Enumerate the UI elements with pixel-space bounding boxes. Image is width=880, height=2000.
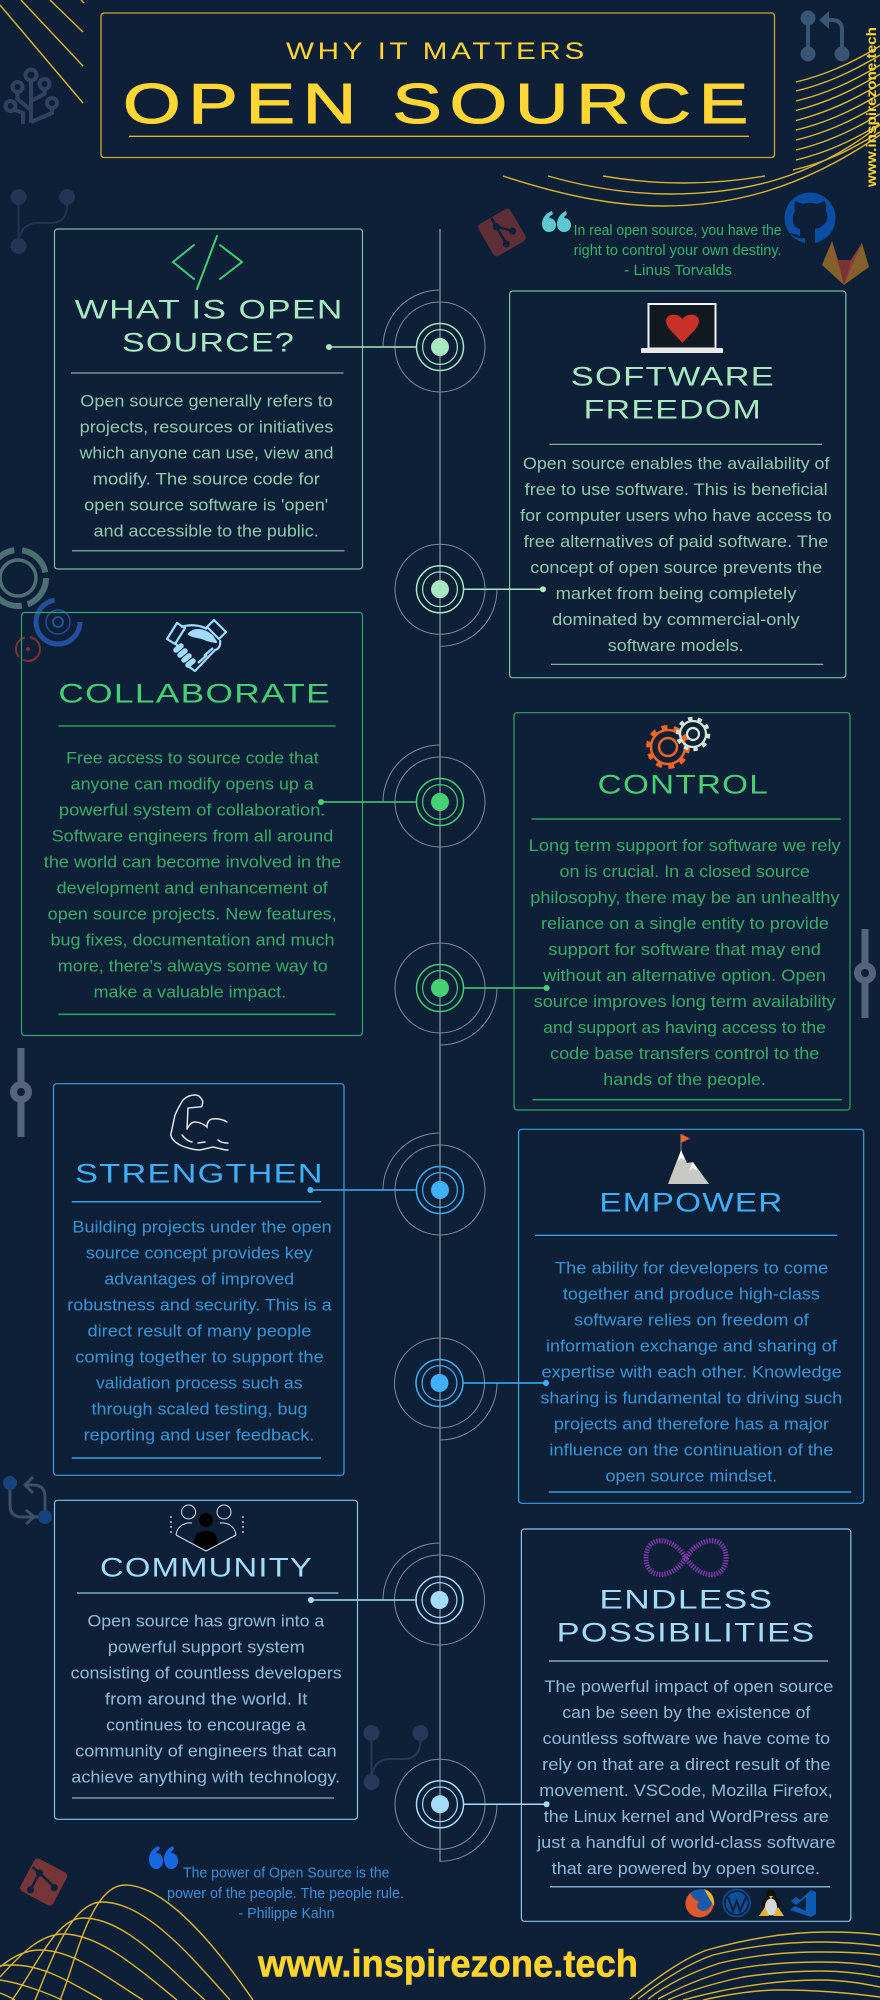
panel: software freedom <box>510 291 846 678</box>
text: endless possibilities body: countless software we have come to <box>543 1729 830 1748</box>
text: collaborate body: development and enhancement of <box>57 878 328 897</box>
text: collaborate body: powerful system of collaboration. <box>59 800 326 819</box>
text: control body: philosophy, there may be an unhealthy <box>530 888 840 907</box>
node 7 <box>308 1543 484 1645</box>
text: strengthen body <box>67 1218 332 1445</box>
text: community body: Open source has grown into a <box>88 1612 325 1631</box>
text: empower body: The ability for developers to come <box>555 1259 828 1278</box>
node 5 <box>307 1133 485 1235</box>
panel: control <box>514 713 850 1110</box>
text: community body: achieve anything with technology. <box>71 1768 340 1787</box>
icon: git branch middle <box>364 1725 428 1790</box>
subtitle: WHY IT MATTERS <box>286 38 588 65</box>
text: strengthen body: validation process such as <box>96 1374 302 1393</box>
panel: what is open source <box>54 229 362 569</box>
text: empower body: together and produce high-class <box>563 1285 820 1304</box>
node 1 <box>326 290 485 392</box>
text: what is open source body: projects, resources or initiatives <box>80 418 333 437</box>
icon: git logo bottom <box>19 1857 69 1907</box>
text: strengthen body: Building projects under the open <box>72 1218 332 1237</box>
text: software freedom body: Open source enables the availability of <box>523 454 830 473</box>
heading: what is open source <box>75 295 344 358</box>
text: control body: and support as having access to the <box>543 1018 826 1037</box>
heading: endless possibilities: POSSIBILITIES <box>557 1617 816 1647</box>
node 8 <box>395 1759 550 1861</box>
text: collaborate body <box>44 748 341 1002</box>
text: software freedom body: for computer users who have access to <box>520 506 832 525</box>
quote: Philippe Kahn: The power of Open Source is the <box>183 1865 390 1882</box>
decoration: top-left yellow diagonal lines <box>0 0 84 103</box>
heading: community: COMMUNITY <box>100 1553 313 1583</box>
quote: Linus Torvalds: In real open source, you have the <box>574 222 782 239</box>
text: control body: without an alternative option. Open <box>542 966 826 985</box>
icon: github <box>784 192 836 245</box>
icon: quote mark blue quote <box>149 1846 178 1869</box>
text: strengthen body: source concept provides key <box>86 1244 313 1263</box>
icon: flexed arm <box>171 1095 228 1150</box>
icon: infinity <box>646 1541 726 1574</box>
text: software freedom body <box>520 454 832 655</box>
heading: empower: EMPOWER <box>599 1188 784 1218</box>
icon: gears <box>648 718 708 767</box>
text: software freedom body: dominated by commercial-only <box>552 610 800 629</box>
decoration: bottom-left yellow curves <box>0 1885 253 2000</box>
text: endless possibilities body: The powerful impact of open source <box>544 1677 833 1696</box>
text: collaborate body: make a valuable impact. <box>94 982 286 1002</box>
text: control body: source improves long term availability <box>534 992 836 1011</box>
text: control body: support for software that may end <box>548 940 821 959</box>
heading: endless possibilities: ENDLESS <box>599 1584 773 1614</box>
text: software freedom body: free to use software. This is beneficial <box>525 480 828 499</box>
text: what is open source body: open source software is 'open' <box>84 496 328 515</box>
main title: OPEN SOURCE <box>123 72 756 136</box>
panel: collaborate <box>22 612 362 1036</box>
icon: handshake <box>167 620 226 671</box>
icon: gitlab <box>822 241 869 285</box>
heading: strengthen: STRENGTHEN <box>75 1159 324 1189</box>
quote: Linus Torvalds <box>574 222 782 279</box>
heading: what is open source: SOURCE? <box>122 328 295 358</box>
text: empower body: influence on the continuation of the <box>549 1441 833 1460</box>
text: community body: continues to encourage a <box>106 1716 306 1735</box>
text: collaborate body: bug fixes, documentation and much <box>50 930 334 949</box>
heading: what is open source: WHAT IS OPEN <box>75 295 344 325</box>
text: strengthen body: reporting and user feedback. <box>84 1426 314 1445</box>
icon: code brackets <box>173 236 242 289</box>
text: what is open source body: and accessible to the public. <box>94 522 319 541</box>
text: community body: from around the world. It <box>105 1690 308 1709</box>
icon: right slider wrench <box>854 929 876 1018</box>
decoration: bottom-right yellow curves <box>630 1932 880 2000</box>
text: software freedom body: free alternatives of paid software. The <box>524 532 828 551</box>
icon: circuit tree <box>6 70 57 124</box>
text: collaborate body: Software engineers from all around <box>52 826 333 845</box>
heading: control: CONTROL <box>598 769 769 799</box>
node 6 <box>394 1338 549 1440</box>
text: control body <box>529 836 841 1089</box>
text: strengthen body: direct result of many people <box>88 1322 311 1341</box>
text: empower body: information exchange and sharing of <box>546 1337 837 1356</box>
text: endless possibilities body <box>536 1677 836 1878</box>
text: community body <box>71 1612 342 1787</box>
text: strengthen body: through scaled testing, bug <box>92 1400 308 1419</box>
icon: arrows swap <box>3 1476 52 1524</box>
icon: tux penguin <box>759 1889 784 1917</box>
vertical website text: www.inspirezone.tech <box>863 27 879 188</box>
heading: software freedom: FREEDOM <box>584 394 762 424</box>
icon: left slider wrench <box>10 1048 32 1137</box>
heading: software freedom: SOFTWARE <box>571 361 775 391</box>
text: endless possibilities body: rely on that are a direct result of the <box>542 1755 831 1774</box>
text: endless possibilities body: just a handful of world-class software <box>536 1833 836 1852</box>
text: collaborate body: anyone can modify opens up a <box>71 774 314 793</box>
text: empower body: open source mindset. <box>606 1467 777 1486</box>
text: collaborate body: open source projects. New features, <box>48 904 337 923</box>
text: what is open source body: Open source generally refers to <box>80 392 333 411</box>
text: what is open source body <box>79 392 333 541</box>
icon: git branch top-left <box>10 189 75 254</box>
icon: pull request <box>800 10 850 62</box>
decoration: top-right yellow wave lines <box>503 46 880 206</box>
text: control body: hands of the people. <box>603 1070 766 1089</box>
text: software freedom body: market from being completely <box>556 584 797 603</box>
text: collaborate body: Free access to source code that <box>66 748 319 767</box>
text: empower body: software relies on freedom of <box>574 1311 809 1330</box>
text: what is open source body: which anyone can use, view and <box>79 444 333 463</box>
text: empower body: sharing is fundamental to driving such <box>540 1389 842 1408</box>
icon: vscode <box>790 1890 816 1917</box>
text: community body: community of engineers that can <box>75 1742 337 1761</box>
text: endless possibilities body: that are powered by open source. <box>552 1859 820 1878</box>
icon: laptop with heart <box>641 304 723 353</box>
heading: collaborate: COLLABORATE <box>58 679 331 709</box>
node 3 <box>318 745 485 847</box>
text: strengthen body: robustness and security. This is a <box>67 1296 332 1315</box>
icon: mountain with flag <box>668 1134 709 1184</box>
text: control body: code base transfers control to the <box>550 1044 819 1063</box>
text: control body: reliance on a single entity to provide <box>541 914 829 933</box>
text: collaborate body: more, there's always some way to <box>58 956 328 975</box>
node 2 <box>395 544 546 646</box>
quote: Linus Torvalds: right to control your own destiny. <box>574 242 782 259</box>
footer website: www.inspirezone.tech <box>257 1944 638 1986</box>
icon: blue dial <box>36 600 80 644</box>
text: empower body: projects and therefore has a major <box>554 1415 829 1434</box>
quote: Linus Torvalds: - Linus Torvalds <box>624 262 732 279</box>
icon: red dial <box>16 637 40 661</box>
panel: endless possibilities <box>521 1529 851 1921</box>
timeline vertical line <box>439 229 441 1862</box>
icon: git logo top <box>477 207 527 258</box>
text: collaborate body: the world can become involved in the <box>44 852 341 871</box>
panel: community <box>54 1500 358 1819</box>
panel: empower <box>519 1129 864 1503</box>
text: strengthen body: advantages of improved <box>104 1270 294 1289</box>
text: control body: Long term support for software we rely <box>529 836 841 855</box>
heading: endless possibilities <box>557 1584 816 1647</box>
text: software freedom body: concept of open source prevents the <box>530 558 822 577</box>
icon: people group <box>171 1505 243 1551</box>
text: control body: on is crucial. In a closed source <box>560 862 810 881</box>
text: software freedom body: software models. <box>608 636 744 655</box>
text: empower body <box>540 1259 842 1486</box>
quote: Philippe Kahn: - Philippe Kahn <box>238 1905 334 1922</box>
text: endless possibilities body: the Linux kernel and WordPress are <box>544 1807 829 1826</box>
text: empower body: expertise with each other. Knowledge <box>542 1363 842 1382</box>
text: what is open source body: modify. The source code for <box>93 470 320 489</box>
icon: teal dial <box>0 550 46 606</box>
quote: Philippe Kahn <box>167 1865 404 1922</box>
node 4 <box>395 943 550 1045</box>
panel: strengthen <box>54 1084 344 1475</box>
text: community body: powerful support system <box>108 1638 305 1657</box>
text: community body: consisting of countless developers <box>71 1664 342 1683</box>
heading: software freedom <box>571 361 775 424</box>
quote: Philippe Kahn: power of the people. The people rule. <box>167 1885 404 1902</box>
title panel <box>101 13 774 158</box>
icon: wordpress <box>723 1890 750 1916</box>
icon: firefox <box>686 1889 714 1918</box>
text: strengthen body: coming together to support the <box>75 1348 324 1367</box>
text: endless possibilities body: can be seen by the existence of <box>562 1703 811 1722</box>
text: endless possibilities body: movement. VSCode, Mozilla Firefox, <box>539 1781 833 1800</box>
icon: quote mark green quote <box>542 211 571 232</box>
